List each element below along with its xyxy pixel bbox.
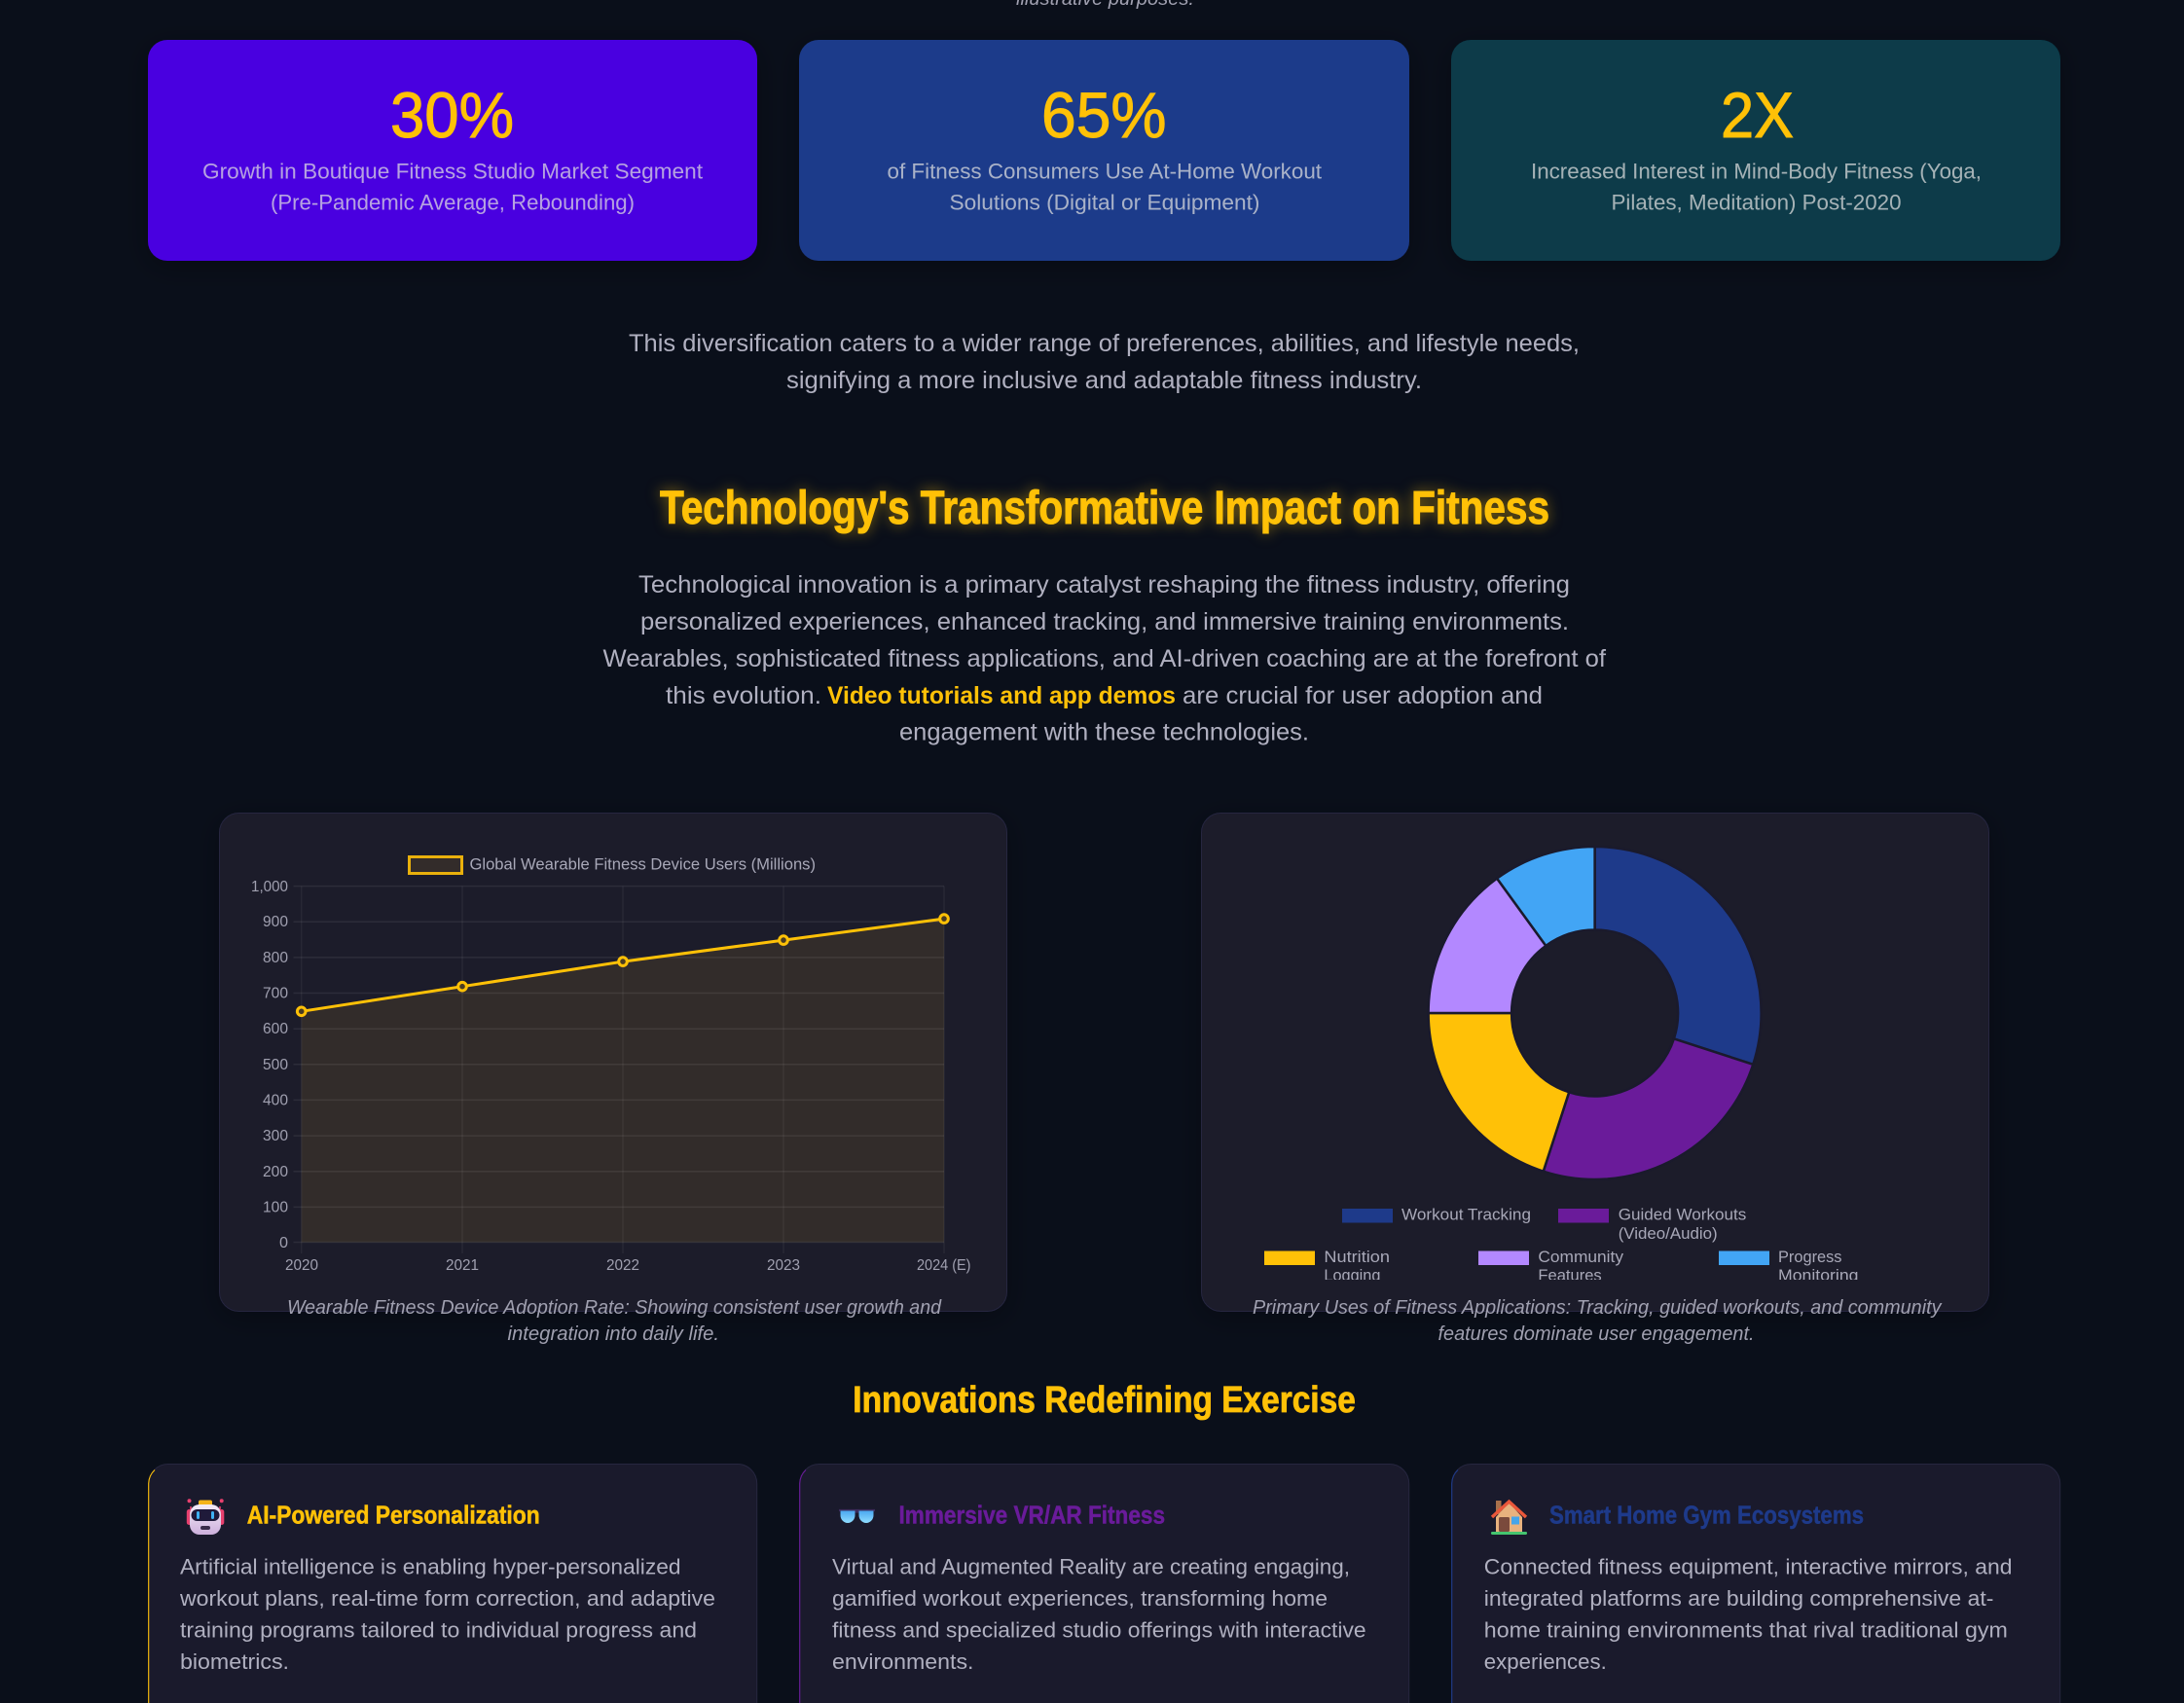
card body text: experiences.	[1484, 1649, 1607, 1674]
x axis labels: 2024 (E)	[917, 1257, 971, 1274]
card body text: workout plans, real-time form correction, and adaptive	[179, 1586, 715, 1611]
y axis labels: 1,000	[251, 879, 288, 895]
text block: technology intro: engagement with these technologies.	[899, 718, 1309, 745]
y axis labels: 600	[263, 1021, 288, 1037]
doughnut legend: Logging	[1324, 1266, 1380, 1285]
stat card: 2X mind-body: Pilates, Meditation) Post-2020	[1612, 191, 1902, 214]
panel: stat cards	[148, 40, 2060, 261]
stat card: 30% boutique growth: 30%	[390, 79, 514, 151]
stat card: 65% at-home: Solutions (Digital or Equipment)	[950, 191, 1259, 214]
text block: technology intro: are crucial for user adoption and	[1183, 682, 1543, 709]
y axis labels: 100	[263, 1199, 288, 1216]
caption: wearable chart: integration into daily life.	[508, 1323, 719, 1345]
doughnut legend: Monitoring	[1778, 1266, 1859, 1285]
x axis labels	[285, 1257, 971, 1274]
chart legend: wearable users: Global Wearable Fitness Device Users (Millions)	[469, 854, 816, 874]
icon: glasses	[839, 1510, 875, 1523]
card body text: biometrics.	[180, 1649, 289, 1674]
card body text	[179, 1555, 715, 1674]
text block: technology intro: this evolution.	[666, 682, 821, 709]
doughnut legend: Guided Workouts	[1619, 1205, 1746, 1224]
icon: house	[1491, 1501, 1527, 1535]
doughnut legend: Workout Tracking	[1401, 1205, 1531, 1224]
doughnut legend: Community	[1538, 1248, 1624, 1266]
y axis labels	[251, 879, 288, 1251]
card body text: training programs tailored to individual progress and	[180, 1618, 697, 1643]
text block: technology intro: Video tutorials and app demos	[827, 682, 1176, 709]
doughnut legend: Progress	[1778, 1248, 1841, 1266]
card body text: integrated platforms are building comprehensive at-	[1484, 1586, 1993, 1611]
caption: wearable chart: Wearable Fitness Device Adoption Rate: Showing consistent user growth and	[287, 1296, 942, 1319]
card body text: gamified workout experiences, transforming home	[832, 1586, 1328, 1611]
stat card: 30% boutique growth	[148, 40, 757, 261]
stat card: 65% at-home	[799, 40, 1409, 261]
text block: technology intro: personalized experiences, enhanced tracking, and immersive training environments.	[640, 608, 1569, 635]
heading: innovations redefining exercise: Innovations Redefining Exercise	[853, 1380, 1356, 1421]
card body text	[1484, 1555, 2013, 1674]
stat card: 65% at-home: of Fitness Consumers Use At-Home Workout	[888, 160, 1323, 183]
stat card: 30% boutique growth: Growth in Boutique Fitness Studio Market Segment	[202, 160, 704, 183]
y axis labels: 500	[263, 1057, 288, 1073]
caption: doughnut chart: features dominate user engagement.	[1438, 1323, 1754, 1345]
x axis labels: 2021	[446, 1257, 479, 1274]
text block: technology intro: Technological innovation is a primary catalyst reshaping the fitness industry, offering	[638, 571, 1570, 598]
stat card: 2X mind-body: Increased Interest in Mind-Body Fitness (Yoga,	[1531, 160, 1982, 183]
y axis labels: 800	[263, 950, 288, 966]
doughnut legend: Nutrition	[1324, 1248, 1390, 1266]
text block: diversification summary: This diversification caters to a wider range of preferences, abilities, and lifestyle needs,	[629, 330, 1580, 357]
icon: robot	[187, 1499, 224, 1535]
panel: smart home gym ecosystems	[1452, 1464, 2060, 1703]
card title: Immersive VR/AR Fitness	[899, 1501, 1165, 1530]
text block: technology intro: Wearables, sophisticated fitness applications, and AI-driven coaching are at the forefront of	[603, 645, 1606, 672]
y axis labels: 200	[263, 1164, 288, 1180]
caption: wearable chart	[287, 1296, 942, 1345]
caption: doughnut chart	[1253, 1296, 1943, 1345]
panel: wearable line chart	[220, 814, 1006, 1312]
stat card: 2X mind-body: 2X	[1721, 79, 1794, 151]
stat card: 65% at-home: 65%	[1041, 79, 1166, 151]
doughnut legend: Features	[1538, 1266, 1602, 1285]
card body text: environments.	[832, 1649, 973, 1674]
x axis labels: 2023	[767, 1257, 800, 1274]
text block: diversification summary	[629, 330, 1580, 394]
panel: fitness app doughnut chart	[1201, 814, 1989, 1312]
y axis labels: 400	[263, 1092, 288, 1109]
y axis labels: 300	[263, 1128, 288, 1144]
line chart: users 2020 to 2024	[294, 887, 948, 1253]
card body text: fitness and specialized studio offerings with interactive	[832, 1618, 1366, 1643]
doughnut legend: (Video/Audio)	[1619, 1224, 1718, 1243]
y axis labels: 700	[263, 985, 288, 1002]
caption: doughnut chart: Primary Uses of Fitness Applications: Tracking, guided workouts, and community	[1253, 1296, 1943, 1319]
card body text: Virtual and Augmented Reality are creating engaging,	[832, 1555, 1350, 1579]
panel: immersive VR/AR fitness	[800, 1464, 1409, 1703]
card body text: Artificial intelligence is enabling hyper-personalized	[180, 1555, 681, 1579]
y axis labels: 900	[263, 914, 288, 930]
stat card: 30% boutique growth: (Pre-Pandemic Average, Rebounding)	[271, 191, 635, 214]
card title: AI-Powered Personalization	[247, 1501, 540, 1530]
panel: AI-powered personalization	[149, 1464, 757, 1703]
card body text: home training environments that rival traditional gym	[1484, 1618, 2008, 1643]
y axis labels: 0	[279, 1235, 288, 1251]
card body text: Connected fitness equipment, interactive mirrors, and	[1484, 1555, 2013, 1579]
x axis labels: 2020	[285, 1257, 318, 1274]
x axis labels: 2022	[606, 1257, 639, 1274]
text block: technology intro	[603, 571, 1606, 745]
heading: technology's transformative impact: Technology's Transformative Impact on Fitness	[660, 483, 1549, 534]
card body text	[832, 1555, 1366, 1674]
text block: diversification summary: signifying a more inclusive and adaptable fitness industry.	[786, 367, 1422, 394]
card title: Smart Home Gym Ecosystems	[1549, 1501, 1864, 1530]
stat card: 2X mind-body	[1451, 40, 2060, 261]
doughnut legend	[1264, 1205, 1859, 1285]
doughnut chart: app uses	[1429, 847, 1762, 1179]
